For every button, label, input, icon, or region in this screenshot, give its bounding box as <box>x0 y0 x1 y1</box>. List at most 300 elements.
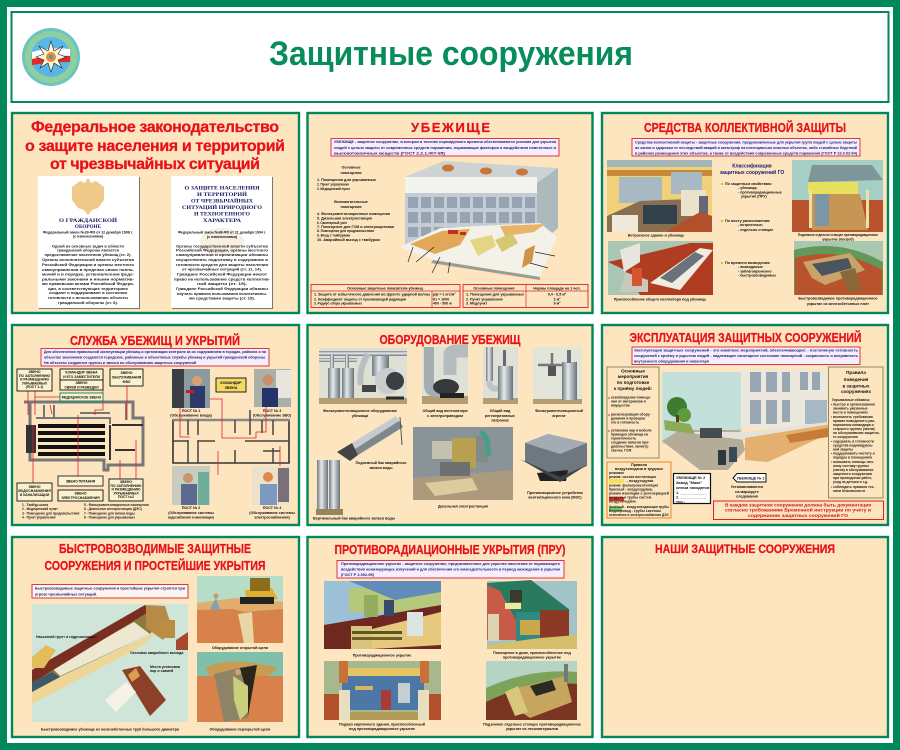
list: auxiliary rooms: 9. Вход с тамбурами <box>317 234 350 238</box>
sign: shelter no. 2 plate: 2. ____________ <box>676 494 707 500</box>
list: main rooms <box>317 166 376 191</box>
table: area norms: 2. Пункт управления <box>466 298 503 302</box>
sign: route pointer <box>733 474 766 482</box>
illustration: protective air intake <box>520 434 587 482</box>
list: main rooms: помещения <box>340 171 362 175</box>
illustration: open slit <box>197 576 283 643</box>
caption: убежища <box>352 414 369 418</box>
heading <box>25 119 285 173</box>
caption <box>798 296 878 306</box>
box: main measures: его в готовность <box>611 420 639 424</box>
caption: Подземный бак аварийного <box>356 461 407 465</box>
plan legend: 7 - Помещение для запаса воды <box>84 512 135 516</box>
box: rules of behaviour: при проведении работ, <box>833 476 872 480</box>
caption: регенеративных <box>485 414 516 418</box>
heading <box>44 541 266 573</box>
box: rules of behaviour: го сооружения <box>833 435 858 439</box>
zone boxes: КОМАНДИР ЗВЕНА <box>65 370 98 374</box>
box: rules of behaviour: места в помещениях <box>833 410 868 414</box>
illustration: filter ventilation equipment <box>319 348 407 404</box>
panel: shelter service <box>12 325 299 525</box>
table: protection indicators: Основные защитные показатели убежищ <box>347 286 424 290</box>
caption: укрытие из лесоматериалов <box>506 727 559 731</box>
definition box <box>337 560 564 578</box>
box: air supply modes: Красный - воздуходувка, <box>609 488 653 492</box>
document: emergency situations law: Органы государственной власти субъектов <box>176 244 269 248</box>
document: emergency situations law: от чрезвычайных ситуаций (ст. 11, 14). <box>182 268 262 272</box>
definition box: их жизни и здоровья от последствий аварий и катастроф на потенциально опасных объектах, либо стихийных бедствий <box>635 146 857 150</box>
heading: СРЕДСТВА КОЛЛЕКТИВНОЙ ЗАЩИТЫ <box>644 120 846 135</box>
box: air supply modes: воздухоподачи в трудных <box>615 467 664 471</box>
illustration: pipe shelter <box>32 604 188 722</box>
caption: агрегат <box>552 414 566 418</box>
document: civil defence law: гражданской обороны является <box>57 248 119 252</box>
table: protection indicators <box>311 284 460 308</box>
document: civil defence law: Федеральный закон №28-ФЗ от 12 декабря 1998 г. <box>43 230 133 234</box>
document: emergency situations law: ОТ ЧРЕЗВЫЧАЙНЫХ <box>191 198 253 204</box>
list: main rooms: 3. Медицинский пункт <box>317 187 350 191</box>
definition box: угрозе чрезвычайных ситуаций. <box>35 592 97 596</box>
definition box <box>32 584 188 598</box>
org links <box>28 375 136 490</box>
box: rules of behaviour: старшего группы (звена) <box>833 427 875 431</box>
photo captions top: ПОСТ № 1 <box>182 409 200 413</box>
box: main measures: приведен убежища на <box>611 432 648 436</box>
caption: Помещение в доме, приспособленное под <box>493 651 571 655</box>
definition box: Для обеспечения правильной эксплуатации убежищ и организации контроля за их содержанием в городах, районах и на <box>44 350 267 354</box>
list: auxiliary rooms <box>317 200 394 242</box>
box: rules of behaviour: • соблюдать правила тех- <box>831 485 874 489</box>
classification text: защитных сооружений ГО <box>720 169 784 176</box>
definition box: внутреннего оборудования и инвентаря <box>634 360 709 364</box>
illustration: filter absorber <box>533 347 582 404</box>
box: rules of behaviour: порядок в помещениях <box>833 456 872 460</box>
photo captions top: (Обслуживание входа) <box>170 414 213 418</box>
caption: signs <box>731 485 763 498</box>
classification text: - убежища; <box>738 186 757 190</box>
photo captions bottom: электроснабжения) <box>254 516 290 520</box>
classification text: По защитным свойствам: <box>725 182 772 186</box>
photo captions bottom <box>168 506 295 520</box>
notice box: содержанию защитных сооружений ГО <box>748 513 849 518</box>
photo captions bottom: ПОСТ № 2 <box>182 506 200 510</box>
document: civil defence law: предоставление населению убежищ (ст. 2). <box>44 253 132 257</box>
definition box <box>632 138 860 156</box>
zone boxes: ПОСТ №2 <box>118 495 134 499</box>
classification text: укрытия (ПРУ) <box>741 194 767 198</box>
sign: shelter no. 2 plate: УБЕЖИЩЕ № 2 <box>676 475 706 480</box>
table: area norms: 1. Помещения для укрываемых <box>466 292 524 296</box>
heading: СООРУЖЕНИЯ И ПРОСТЕЙШИЕ УКРЫТИЯ <box>44 558 266 573</box>
box: rules of behaviour: Укрываемые обязаны: <box>832 398 870 402</box>
document: emergency situations law: самоуправления и организации обязаны <box>176 253 268 257</box>
list: auxiliary rooms: 8. Помещение для продовольствия <box>317 229 374 233</box>
classification text: - отдельно стоящие <box>738 228 773 232</box>
main title: Защитные сооружения <box>269 35 633 73</box>
plan legend: 4 - Пункт управления <box>22 516 56 520</box>
plan legend <box>22 503 149 520</box>
illustration: pipe shelter: нар и скамей <box>150 669 173 673</box>
photo captions bottom: ПОСТ № 4 <box>263 506 282 510</box>
box: rules of behaviour: поведения <box>844 377 869 382</box>
zone boxes: ВОДОСНАБЖЕНИЯ <box>18 489 51 493</box>
definition box: сооружений к приёму и укрытию людей - надлежащее санитарное состояние помещений - сохранность и исправность <box>634 354 859 358</box>
box: main measures: установка нар и мебели <box>611 428 652 432</box>
plan legend: 2 - Медицинский пункт <box>22 507 58 511</box>
document: civil defence law: О ГРАЖДАНСКОЙ <box>59 216 117 224</box>
document: emergency situations law: право на использование средств коллектив- <box>174 278 271 282</box>
illustration: pipe shelter: Насыпной грунт и гидроизоляция <box>36 635 96 639</box>
zone boxes: ЗВЕНО ПИТАНИЯ <box>66 480 96 484</box>
classification text <box>720 162 784 278</box>
box: main measures: ния от материалов и <box>611 400 646 404</box>
definition box: УБЕЖИЩЕ - защитное сооружение, в котором в течение нормируемого времени обеспечиваются условия для укрытия <box>334 140 556 144</box>
caption: Вертикальный бак аварийного запаса воды <box>313 516 395 520</box>
caption: запаса воды <box>369 466 393 470</box>
zone boxes: И КАНАЛИЗАЦИИ <box>20 493 50 497</box>
definition box: Эксплуатация защитных сооружений - это комплекс мероприятий, обеспечивающих: - постоянную готовность <box>634 348 859 352</box>
panel: quickly erected structures <box>12 537 299 737</box>
table: protection indicators: рф = 1 кгс/м² <box>433 292 456 296</box>
panel: our protective structures <box>602 537 888 737</box>
definition box: в районах размещения этих объектов, а также от воздействия современных средств поражения (ГОСТ Р 22.0.02-94) <box>635 152 858 156</box>
box: rules of behaviour: защитного сооружения <box>833 472 872 476</box>
caption: Оборудование открытой щели <box>212 646 269 650</box>
zone boxes: ЗВЕНО <box>29 370 41 374</box>
caption: signs: следования <box>736 494 758 498</box>
table: protection indicators: Кз = 1000 <box>433 298 449 302</box>
illustration: covered slit <box>197 652 283 722</box>
sign: shelter no. 2 plate <box>674 474 710 504</box>
list: auxiliary rooms: 6. Санитарный узел <box>317 221 348 225</box>
zone boxes: И РАЗМЕЩЕНИЮ <box>111 488 141 492</box>
zone boxes <box>17 369 143 501</box>
definition box: На объектах создаются группы и звенья по обслуживанию защитных сооружений <box>44 361 196 365</box>
zone boxes: МЕДИЦИНСКОЕ ЗВЕНО <box>62 396 102 400</box>
panel: shelter <box>308 113 592 313</box>
sign: shelter no. 2 plate: Завод "Маяк" <box>676 480 702 485</box>
definition box: Противорадиационное укрытие - защитное сооружение, предназначенное для укрытия населения от поражающего <box>341 562 561 566</box>
zone boxes: ЭЛЕКТРОСНАБЖЕНИЯ <box>61 496 100 500</box>
definition box: (ГОСТ Р 2.002-95) <box>341 573 375 577</box>
caption: противорадиационное укрытие <box>503 656 561 660</box>
caption: Дизельная электростанция <box>438 504 488 508</box>
icon: emblem of the emergencies ministry <box>22 28 80 86</box>
plan legend: 6 - Дизельная электростанция (ДЭС) <box>84 507 142 511</box>
heading: Федеральное законодательство <box>31 119 279 136</box>
box: main measures: расконсервация обору- <box>611 412 651 416</box>
zone boxes: УКРЫВАЕМЫХ <box>22 381 48 385</box>
box: rules of behaviour: (звена) в обслуживании <box>833 468 873 472</box>
list: auxiliary rooms: Вспомогательные <box>334 200 368 204</box>
plan legend: 8 - Помещение для укрываемых <box>84 516 135 520</box>
commander box: ЗВЕНА <box>225 386 238 390</box>
caption <box>535 409 584 418</box>
classification text: - быстровозводимые <box>738 274 776 278</box>
zone boxes: СВЯЗИ И РАЗВЕДКИ <box>64 386 99 390</box>
caption <box>485 409 516 422</box>
box: main measures: Основные <box>621 368 645 374</box>
plan legend: 1 - Тамбур-шлюз <box>22 503 49 507</box>
box: rules of behaviour: Правила <box>846 370 866 375</box>
table: protection indicators: 2. Коэффициент защиты от проникающей радиации <box>314 298 406 302</box>
zone boxes: ПО ЗАПОЛНЕНИЮ <box>19 374 51 378</box>
zone boxes: ЗВЕНО <box>76 381 88 385</box>
caption: с электроприводом <box>427 414 463 418</box>
box: rules of behaviour: • быстро и организованно <box>831 402 875 406</box>
box: rules of behaviour: уход за детьми и т.д. <box>833 480 868 484</box>
document: civil defence law: Одной из основных задач в области <box>52 244 125 248</box>
box: main measures: к приёму людей: <box>614 385 653 391</box>
caption: Общий вид вентилятора <box>422 409 468 413</box>
box: air supply modes: отопления и электроснабжения ДЭС <box>609 513 669 517</box>
sign: shelter no. 2 plate: ключи находятся <box>676 485 709 490</box>
box: main measures: освобождение помеще- <box>611 396 651 400</box>
definition box <box>41 348 269 366</box>
caption <box>422 409 468 418</box>
document: emergency situations law: Федеральный закон №68-ФЗ от 21 декабря 1994 г. <box>178 230 266 234</box>
heading: У Б Е Ж И Щ Е <box>411 120 490 135</box>
caption: Подвал кирпичного здания, приспособленный <box>339 722 426 726</box>
document: civil defence law: Российской Федерации и органы местного <box>42 263 135 267</box>
document: civil defence law: самоуправления в пределах своих полно- <box>42 268 135 272</box>
illustration: regenerative cartridge <box>483 347 518 404</box>
illustration: prefabricated shelter <box>794 241 883 295</box>
sign: shelter no. 2 plate: 1. ____________ <box>676 490 707 495</box>
caption: signs: на маршруте <box>735 490 759 494</box>
list: auxiliary rooms: 5. Дизельная электростанция <box>317 216 372 220</box>
caption: вентиляционного окна (МЗС) <box>528 496 582 500</box>
caption: Противовзрывное устройство <box>527 491 584 495</box>
photo: post 1 <box>172 369 210 408</box>
document: civil defence law <box>38 176 140 309</box>
definition box <box>331 138 559 156</box>
illustration: built-in shelter <box>607 160 712 232</box>
illustration: dugout shelter <box>486 661 577 720</box>
photo captions top <box>170 409 292 418</box>
caption: Общий вид <box>490 409 511 413</box>
document: emergency situations law: (с изменениями) <box>207 235 238 239</box>
definition box: воздействия ионизирующих излучений и для обеспечения его жизнедеятельности в период нахождения в укрытии <box>341 568 560 572</box>
document: emergency situations law: И ТЕХНОГЕННОГО <box>194 212 250 218</box>
notice box <box>714 501 884 520</box>
document: civil defence law: ми правовыми актами Российской Федера- <box>42 282 135 286</box>
document: civil defence law: создают и поддерживают в состоянии <box>49 291 128 295</box>
definition box: Быстровозводимые защитные сооружения и простейшие укрытия строятся при <box>35 586 185 590</box>
photo captions top: (Обслуживание ЗВО) <box>253 414 292 418</box>
document: civil defence law: готовности к использованию объекты <box>48 296 128 300</box>
zone boxes: ЗВЕНО <box>121 371 133 375</box>
photo: post 4 <box>252 466 290 505</box>
heading: ОБОРУДОВАНИЕ УБЕЖИЩ <box>380 332 521 347</box>
zone boxes: ОБСЛУЖИВАНИЯ <box>112 376 142 380</box>
document: emergency situations law: И ТЕРРИТОРИЙ <box>197 192 247 198</box>
notice box: согласно требованиям Временной инструкции по учёту и <box>725 508 871 512</box>
post links <box>180 399 280 475</box>
heading: СЛУЖБА УБЕЖИЩ И УКРЫТИЙ <box>70 333 240 348</box>
photo: post 3 <box>254 369 291 407</box>
illustration: utility tunnel shelter <box>608 241 713 295</box>
document: civil defence law: гражданской обороны (ст. 8). <box>58 301 118 305</box>
definition box: высокотоксичных веществ (ГОСТ 2.2.1.007-85) <box>334 151 446 155</box>
box: rules of behaviour: • содержать в готовности <box>831 440 874 444</box>
box: air supply modes: режимах <box>609 471 624 475</box>
box: rules of behaviour: ному составу группы <box>833 464 869 468</box>
illustration: diesel generator <box>413 427 513 500</box>
heading: ПРОТИВОРАДИАЦИОННЫЕ УКРЫТИЯ (ПРУ) <box>334 542 566 557</box>
document: emergency situations law: О ЗАЩИТЕ НАСЕЛЕНИЯ <box>184 186 260 192</box>
list: main rooms: Основные <box>341 166 361 170</box>
box: air supply modes: режим: чистая вентиляция <box>609 475 656 479</box>
caption: патронов <box>491 418 509 422</box>
floor plan: shelter <box>24 402 143 470</box>
document: emergency situations law: осуществлять подготовку и содержание в <box>176 258 269 262</box>
definition box <box>632 347 860 364</box>
zone boxes: ЗВЕНО <box>75 492 87 496</box>
icon: coat of arms <box>72 178 104 215</box>
heading: НАШИ ЗАЩИТНЫЕ СООРУЖЕНИЯ <box>655 542 835 556</box>
document: emergency situations law: Граждане Российской Федерации имеют <box>177 272 267 276</box>
caption <box>493 651 571 660</box>
list: auxiliary rooms: 10. Аварийный выход с тамбуром <box>317 238 380 242</box>
document: civil defence law: мочий и в порядке, установленном феде- <box>42 272 135 276</box>
box: main measures: дования и проверка <box>611 416 645 420</box>
caption <box>798 233 878 242</box>
photo captions bottom: водоснабжения и канализации) <box>168 516 215 520</box>
caption: укрытие из железобетонных плит <box>807 302 869 306</box>
sign: route pointer: УБЕЖИЩЕ № 2 <box>737 476 764 480</box>
plan legend: 3 - Помещение для продовольствия <box>22 512 80 516</box>
zone boxes: И ЕГО ЗАМЕСТИТЕЛИ <box>63 375 100 379</box>
panel: operation of protective structures <box>602 325 888 525</box>
panel: anti-radiation shelters <box>308 537 592 737</box>
classification text: - противорадиационные <box>738 190 782 194</box>
illustration: adapted house <box>487 580 577 649</box>
table: area norms: 2 м² <box>553 298 561 302</box>
definition box: Средства коллективной защиты - защитные сооружения, предназначенные для укрытия групп людей с целью защиты <box>635 140 857 144</box>
table: protection indicators: 1. Защита от избыточного давления во фронте ударной волны <box>314 292 430 296</box>
caption <box>356 461 407 470</box>
box: rules of behaviour: ники безопасности <box>833 489 865 493</box>
document: civil defence law: ции, в соответствующих территориях <box>48 287 129 291</box>
box: main measures: свечек, ГСМ <box>611 448 631 452</box>
box: main measures: имущества <box>611 404 630 408</box>
document: civil defence law: Органы исполнительной власти субъектов <box>42 258 135 262</box>
caption: Подземное отдельно стоящее противорадиационное <box>483 722 581 726</box>
floor plan: section <box>173 410 290 463</box>
box: rules of behaviour: занимать указанные <box>833 406 868 410</box>
box: rules of behaviour: сооружениях <box>841 389 871 394</box>
document: civil defence law: ОБОРОНЕ <box>75 224 102 230</box>
table: area norms: Нормы площади на 1 чел. <box>533 286 581 290</box>
panel: shelter equipment <box>308 325 592 525</box>
table: area norms: 3. Медпункт <box>466 302 487 306</box>
table: protection indicators: 3. Радиус сбора укрываемых <box>314 302 362 306</box>
classification text: - возводимые <box>738 265 763 269</box>
document: emergency situations law: ной защиты (ст. 19). <box>197 282 247 286</box>
illustration: pipe shelter: Места установки <box>150 665 180 669</box>
box: rules of behaviour: правил поведения и рас- <box>833 419 875 423</box>
zone boxes: ЗВЕНО <box>29 485 41 489</box>
list: auxiliary rooms: 4. Фильтровентиляционные помещения <box>317 212 390 216</box>
illustration: shelter under building <box>400 161 558 280</box>
caption <box>339 722 426 731</box>
caption: Противорадиационное укрытие <box>353 654 411 658</box>
box: rules of behaviour: ной защиты <box>833 448 853 452</box>
illustration: vertical water tanks <box>316 460 343 515</box>
photo captions bottom: (Обслуживание системы <box>168 511 214 515</box>
box: air supply modes: - воздуходувка <box>627 479 653 483</box>
table: area norms <box>463 284 588 308</box>
box: main measures: довольствия, канистр <box>611 444 648 448</box>
caption: Встроенное здание и убежище <box>628 234 684 238</box>
sign: shelter no. 2 plate: тел.: __________ <box>676 499 708 504</box>
box: rules of behaviour: по обслуживанию защитно- <box>833 431 880 435</box>
caption: укрытие (погреб) <box>822 238 854 242</box>
list: auxiliary rooms: помещения <box>340 205 362 209</box>
box: rules of behaviour: поряжения командира и <box>833 423 874 427</box>
document: emergency situations law <box>171 176 273 309</box>
document: emergency situations law: СИТУАЦИЙ ПРИРОДНОГО <box>182 205 262 211</box>
box: main measures: мероприятия <box>618 374 649 379</box>
list: main rooms: 1. Помещения для укрываемых <box>317 178 376 182</box>
caption: Подземное отдельно стоящее противорадиационное <box>798 233 878 237</box>
illustration: shelter in a house basement <box>324 581 441 649</box>
illustration: building with shelter <box>662 370 832 470</box>
box: main measures <box>607 367 659 458</box>
classification text: По времени возведения: <box>725 261 771 265</box>
table: area norms: 0,4 - 0,5 м² <box>548 292 567 296</box>
caption: Быстровозводимое убежище из железобетонных труб большого диаметра <box>41 728 180 732</box>
commander box: КОМАНДИР <box>220 381 242 385</box>
box: rules of behaviour: • выполнять требования <box>831 415 873 419</box>
zone boxes: ЗВЕНО <box>120 480 132 484</box>
document: emergency situations law: Граждане Российской Федерации обязаны <box>176 287 268 291</box>
illustration: fan unit <box>422 347 468 404</box>
photo captions bottom: (Обслуживание системы <box>249 511 295 515</box>
box: air supply modes: воздухоподачи <box>609 500 636 504</box>
header panel <box>12 12 888 102</box>
definition box: объектах экономики создаются городские, районные и объектовые службы убежищ и укрытий гражданской обороны. <box>44 356 266 360</box>
document: civil defence law: (с изменениями) <box>73 234 104 238</box>
box: main measures: создание запасов про- <box>611 440 649 444</box>
table: area norms: Основные помещения <box>473 286 515 290</box>
box: air supply modes <box>607 462 671 518</box>
box: air supply modes: воздуха и трубы систем <box>609 496 652 500</box>
illustration: detached shelter <box>792 160 883 232</box>
panel: collective protection <box>602 113 888 313</box>
box: air supply modes: Зелёный - воздухоподающая трубы <box>609 505 669 509</box>
heading: о защите населения и территорий <box>25 138 285 155</box>
list: main rooms: 2. Пункт управления <box>317 182 349 186</box>
illustration: adapted basement <box>324 661 441 720</box>
caption <box>527 491 584 500</box>
zone boxes: (ПОСТ 1-1) <box>26 385 43 389</box>
heading: от чрезвычайных ситуаций <box>50 156 260 173</box>
caption: Фильтровентиляционное оборудование <box>323 409 397 413</box>
box: air supply modes: Водопровод - трубы системы <box>609 509 661 513</box>
classification text: Классификация <box>732 162 772 170</box>
table: area norms: 9 м² <box>553 302 561 306</box>
definition box: людей с целью защиты от современных средств поражения, поражающих факторов и воздействия поветочных и <box>334 146 556 150</box>
photo: post 2 <box>172 466 210 505</box>
box: rules of behaviour: в защитных <box>842 384 870 388</box>
box: air supply modes: режим изоляции с регенерацией <box>609 492 669 496</box>
box: air supply modes: режим: фильтровентиляция <box>609 484 658 488</box>
classification text: - заблаговременно <box>738 270 772 274</box>
illustration: underground water tank <box>337 416 403 461</box>
classification text: По месту расположения: <box>725 219 770 223</box>
